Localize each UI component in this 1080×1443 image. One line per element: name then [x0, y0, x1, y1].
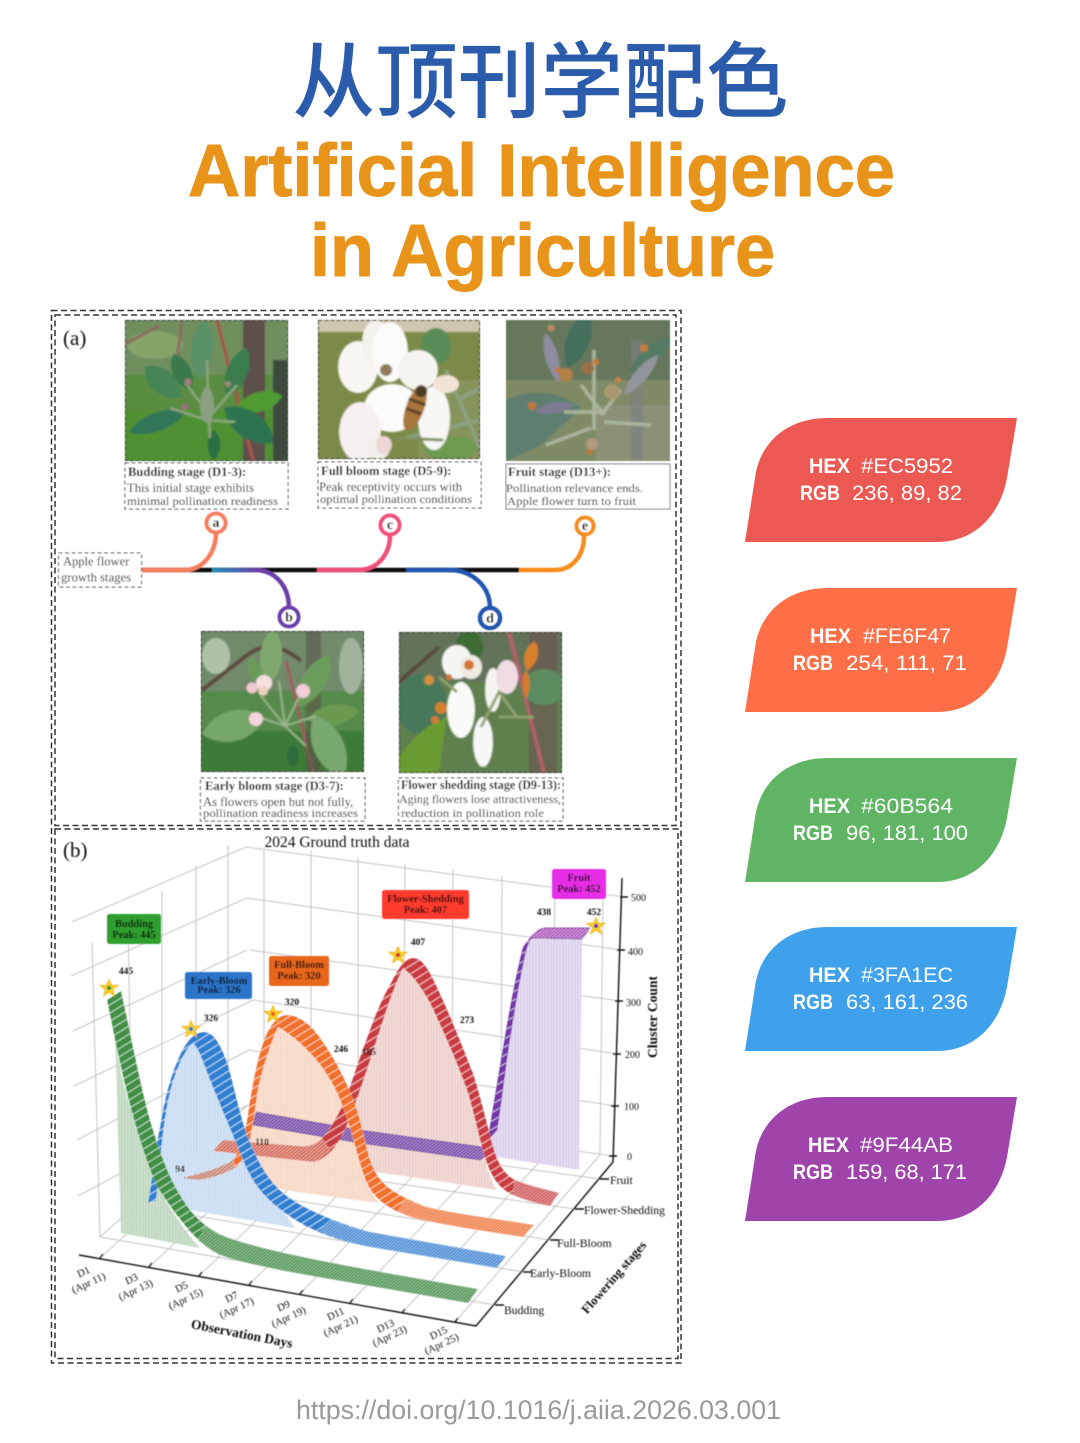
- peak callout: fruit: Peak: 452: [557, 884, 601, 895]
- data value labels: 438: [537, 908, 551, 918]
- node e: [576, 518, 594, 534]
- panel label b: (b): [63, 838, 88, 862]
- caption: full bloom stage: Full bloom stage (D5-9):: [321, 464, 451, 478]
- curtains under the ridges: [115, 938, 582, 1248]
- x axis tick labels: (Apr 11): [70, 1271, 108, 1296]
- swatch: EC5952: [745, 418, 1017, 542]
- caption: fruit stage: [506, 464, 670, 509]
- peak callout: early-bloom: Early-Bloom: [191, 976, 248, 987]
- node c: [380, 516, 400, 534]
- peak callout: budding: Budding: [115, 919, 154, 930]
- peak callout: flower-shedding: Peak: 407: [404, 905, 447, 916]
- ribbon: full-bloom: [180, 1015, 534, 1237]
- swatch: 60B564: [745, 758, 1017, 882]
- swatch: 9F44AB: [745, 1097, 1017, 1221]
- x axis tick labels: D11: [326, 1306, 346, 1323]
- caption: flower shedding stage: Flower shedding stage (D9-13):: [401, 778, 561, 792]
- label: apple flower growth stages: Apple flower: [63, 554, 130, 568]
- peak callout: full-bloom: [269, 956, 329, 986]
- data value labels: 326: [204, 1014, 218, 1024]
- cluster count tick labels: 100: [624, 1102, 639, 1113]
- x axis tick labels: (Apr 13): [117, 1278, 155, 1303]
- node c: c: [387, 518, 393, 533]
- label: apple flower growth stages: growth stages: [61, 570, 131, 584]
- x axis tick labels: (Apr 23): [371, 1324, 409, 1349]
- photo: fruit stage: [505, 319, 671, 462]
- data value labels: 320: [285, 998, 299, 1008]
- caption: flower shedding stage: [398, 778, 563, 821]
- source doi: https://doi.org/10.1016/j.aiia.2026.03.001: [296, 1395, 781, 1425]
- x axis tick labels: (Apr 19): [270, 1305, 308, 1330]
- swatch: 60B564: RGB: [793, 821, 833, 845]
- node e: e: [582, 519, 588, 534]
- panel label a: (a): [63, 326, 86, 350]
- caption: early bloom stage: [200, 778, 365, 821]
- cluster count tick labels: 500: [631, 893, 646, 904]
- peak callout: budding: Peak: 445: [112, 930, 156, 941]
- stage axis labels: Early-Bloom: [530, 1267, 591, 1280]
- data value labels: 273: [460, 1016, 474, 1026]
- x axis tick labels: (Apr 15): [167, 1287, 205, 1312]
- node a: a: [212, 516, 220, 531]
- peak callout: budding: [107, 914, 161, 944]
- stage axis labels: Full-Bloom: [557, 1237, 612, 1250]
- axes: [79, 878, 628, 1326]
- swatch: 3FA1EC: RGB: [793, 990, 833, 1014]
- node b: [280, 608, 298, 626]
- swatch: EC5952: 236, 89, 82: [852, 481, 962, 505]
- peak callout: full-bloom: Full-Bloom: [274, 960, 324, 971]
- x axis tick labels: D1: [76, 1265, 92, 1280]
- timeline: growth stage branches: [142, 532, 584, 608]
- swatch: 9F44AB: #9F44AB: [860, 1133, 953, 1157]
- swatch: FE6F47: #FE6F47: [863, 624, 951, 648]
- title: english heading: Artificial Intelligence: [188, 129, 895, 212]
- caption: budding stage: This initial stage exhibits: [127, 481, 254, 495]
- caption: full bloom stage: optimal pollination conditions: [320, 492, 472, 506]
- peak callout: fruit: Fruit: [568, 873, 591, 884]
- stars: [100, 918, 605, 1036]
- swatch: 60B564: 96, 181, 100: [846, 821, 968, 845]
- swatch: 3FA1EC: #3FA1EC: [861, 963, 953, 987]
- swatch: 3FA1EC: HEX: [809, 963, 851, 987]
- title: english heading: [188, 129, 895, 292]
- data value labels: [119, 908, 601, 1175]
- cluster count tick labels: [624, 893, 646, 1163]
- photo: flower shedding stage: [398, 631, 563, 774]
- swatch: 9F44AB: HEX: [808, 1133, 850, 1157]
- cluster count tick labels: 400: [628, 947, 643, 958]
- caption: flower shedding stage: Aging flowers lose attractiveness,: [399, 792, 561, 806]
- stage axis labels: Fruit: [610, 1174, 633, 1187]
- x axis tick labels: (Apr 21): [322, 1314, 360, 1339]
- caption: early bloom stage: As flowers open but not fully,: [203, 795, 353, 809]
- caption: full bloom stage: [318, 462, 481, 508]
- x axis tick labels: D9: [276, 1299, 292, 1314]
- stage axis labels: [504, 1174, 665, 1317]
- swatch: FE6F47: RGB: [793, 651, 833, 675]
- swatch: 3FA1EC: [745, 927, 1017, 1051]
- swatch: 9F44AB: 159, 68, 171: [846, 1160, 967, 1184]
- node b: b: [285, 610, 293, 626]
- swatch: EC5952: #EC5952: [861, 454, 953, 478]
- stage axis title: Flowering stages: [579, 1238, 649, 1316]
- cluster count tick labels: 300: [626, 998, 641, 1009]
- photo: early bloom stage: [200, 630, 365, 773]
- swatch: 3FA1EC: 63, 161, 236: [846, 990, 968, 1014]
- data value labels: 407: [411, 938, 425, 948]
- label: apple flower growth stages: [58, 553, 142, 587]
- peak callout: early-bloom: Peak: 326: [197, 985, 241, 996]
- x axis tick labels: (Apr 17): [218, 1296, 256, 1321]
- panel: a growth stages: [58, 308, 678, 821]
- swatch: 9F44AB: RGB: [793, 1160, 833, 1184]
- caption: fruit stage: Pollination relevance ends.: [506, 481, 643, 495]
- data value labels: 445: [119, 967, 133, 977]
- caption: early bloom stage: pollination readiness increases: [203, 806, 358, 820]
- x axis tick labels: D13: [375, 1318, 396, 1336]
- title: chinese heading: 从顶刊学配色: [292, 36, 788, 129]
- peak callout: flower-shedding: [382, 890, 469, 919]
- swatch: 60B564: HEX: [809, 794, 851, 818]
- x axis tick labels: D15: [428, 1325, 449, 1343]
- x axis tick labels: D5: [174, 1280, 190, 1295]
- caption: early bloom stage: Early bloom stage (D3-7):: [205, 779, 344, 793]
- x axis tick labels: (Apr 25): [423, 1332, 461, 1357]
- ribbon: flower-shedding: [213, 958, 559, 1206]
- peak callout: flower-shedding: Flower-Shedding: [387, 894, 465, 905]
- data value labels: 185: [362, 1048, 376, 1058]
- stage axis labels: Budding: [504, 1304, 544, 1317]
- data value labels: 110: [255, 1138, 269, 1148]
- title: english heading: in Agriculture: [310, 209, 775, 292]
- caption: full bloom stage: Peak receptivity occurs with: [319, 480, 463, 494]
- node d: d: [486, 612, 494, 626]
- ribbon: early-bloom: [148, 1032, 506, 1268]
- photo: budding stage: [124, 319, 289, 462]
- caption: budding stage: Budding stage (D1-3):: [128, 465, 246, 479]
- photo: full bloom stage: [317, 319, 481, 460]
- x axis tick labels: [70, 1265, 461, 1357]
- peak callout: full-bloom: Peak: 320: [277, 971, 321, 982]
- stage axis labels: Flower-Shedding: [584, 1204, 665, 1217]
- x axis tick labels: D7: [224, 1290, 240, 1305]
- caption: flower shedding stage: reduction in pollination role: [401, 806, 544, 820]
- figure frame: [52, 310, 681, 1363]
- caption: budding stage: minimal pollination readiness: [127, 494, 278, 508]
- chart title: 2024 Ground truth data: [264, 834, 410, 851]
- data value labels: 94: [175, 1165, 185, 1175]
- cluster count tick labels: 0: [627, 1152, 632, 1163]
- swatch: 60B564: #60B564: [861, 794, 953, 818]
- cluster count tick labels: 200: [625, 1050, 640, 1061]
- caption: fruit stage: Apple flower turn to fruit: [507, 494, 637, 508]
- 3D grid walls and floor: [71, 845, 625, 1322]
- node d: [480, 608, 500, 628]
- x axis tick labels: D3: [124, 1272, 140, 1287]
- peak callout: early-bloom: [185, 972, 252, 999]
- x axis title: Observation Days: [190, 1316, 294, 1351]
- swatch: FE6F47: HEX: [810, 624, 852, 648]
- peak callout: fruit: [552, 869, 606, 899]
- swatch: EC5952: HEX: [809, 454, 851, 478]
- swatch: FE6F47: [745, 588, 1017, 712]
- ribbon: fruit: [253, 928, 590, 1160]
- caption: budding stage: [125, 463, 288, 509]
- caption: fruit stage: Fruit stage (D13+):: [508, 465, 611, 479]
- ribbon: budding: [107, 991, 478, 1303]
- node a: [206, 514, 226, 532]
- panel: b 3D ridge chart: [63, 834, 665, 1357]
- data value labels: 246: [334, 1045, 348, 1055]
- cluster count axis title: Cluster Count: [645, 976, 660, 1058]
- swatch: FE6F47: 254, 111, 71: [846, 651, 967, 675]
- swatch: EC5952: RGB: [800, 481, 840, 505]
- data value labels: 452: [587, 908, 601, 918]
- ridges: [107, 928, 590, 1303]
